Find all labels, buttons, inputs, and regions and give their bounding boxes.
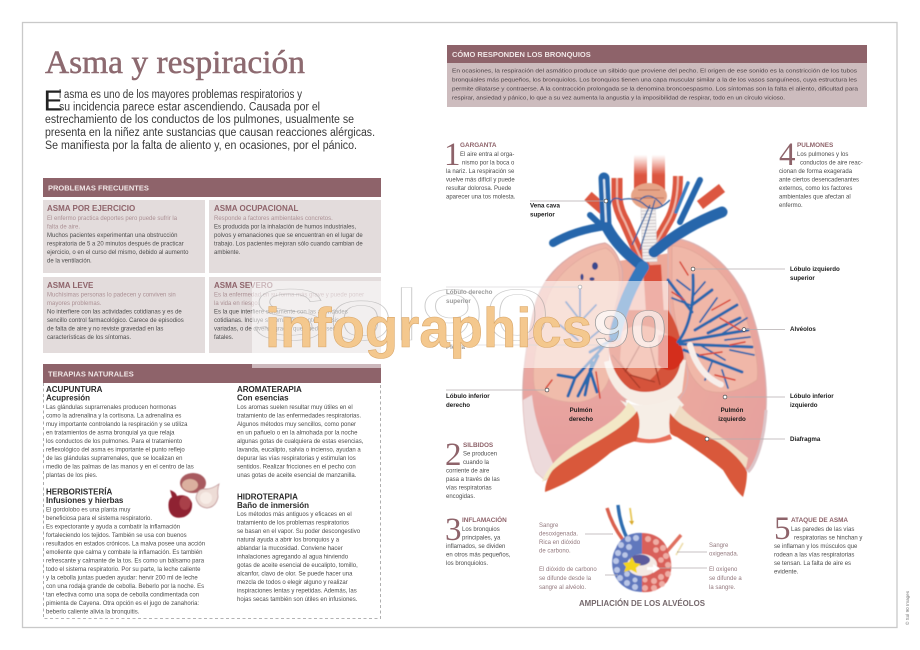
veins — [553, 178, 722, 335]
thyroid — [631, 183, 667, 209]
labels: alveoli: sangre al alvéolo. — [539, 585, 586, 591]
step 3: inflamación: los bronquiolos. — [446, 561, 488, 567]
text block: herboristería: con una rodaja grande de cebolla. Beberlo por la noche. Es — [46, 584, 204, 590]
text block: acupuntura: reflexológico del asma es importante el punto reflejo — [46, 448, 185, 454]
card: asma leve: características de los síntomas. — [47, 335, 131, 341]
labels: alveoli: El dióxido de carbono — [539, 567, 597, 573]
card: asma por ejercicio: falta de aire. — [47, 224, 80, 230]
step 4: pulmones: ante ciertos desencadenantes — [779, 178, 859, 184]
heading: cómo responden los bronquios: CÓMO RESPONDEN LOS BRONQUIOS — [452, 50, 591, 59]
text block: hidroterapia: inspiraciones lentas y repetidas. Además, las — [237, 588, 357, 594]
card: asma severo: Es la enfermedad en su forma más grave y puede poner — [214, 292, 364, 298]
spots — [580, 262, 598, 281]
step 2: silbidos: corriente de aire — [446, 468, 490, 474]
intro paragraph: l asma es uno de los mayores problemas respiratorios y — [59, 89, 302, 101]
text block: aromaterapia: lavanda, eucalipto, salvia o incienso, ayudan a — [237, 448, 361, 454]
step 3: inflamación — [445, 512, 511, 567]
step 3: inflamación: principales, ya — [462, 536, 501, 542]
text block: aromaterapia: Con esencias — [237, 394, 289, 402]
step 3: inflamación: INFLAMACIÓN — [462, 515, 507, 524]
text block: aromaterapia: Algunos métodos muy sencillos, como poner — [237, 422, 356, 428]
text block: herboristería: Infusiones y hierbas — [46, 496, 124, 505]
card: asma severo: cotidianas. Incluye síntomas frecuentes y crisis — [214, 318, 339, 324]
text block: acupuntura: muy importante controlando la respiración y se utiliza — [46, 422, 188, 428]
labels: alveoli: El oxígeno — [709, 567, 738, 573]
labels: alveoli: desoxigenada. — [539, 532, 578, 538]
text block: aromaterapia: sentidos. Realizar fricciones en el pecho con — [237, 464, 356, 470]
text block: hidroterapia: tratamiento de los problemas respiratorios — [237, 520, 349, 526]
step 5: ataque de asma: rodean a las vías respiratorias — [774, 552, 854, 558]
labels: lungs: superior — [446, 298, 471, 305]
card: asma leve: de falta de aire y no reviste gravedad en las — [47, 326, 163, 332]
text block: acupuntura: de las glándulas suprarrenales, que se localizan en — [46, 456, 182, 462]
step 4: pulmones: externos, como los factores — [779, 186, 852, 192]
bronchial tree right — [546, 288, 612, 398]
card: asma por ejercicio — [43, 200, 205, 273]
card: asma por ejercicio: El enfermo practica deportes pero puede sufrir la — [47, 216, 178, 222]
card: asma severo: variadas, o de diverso grado, que pueden ser — [214, 326, 335, 332]
text block: herboristería: El gordolobo es una planta muy — [46, 508, 130, 514]
step 5: ataque de asma: se inflaman y los músculos que — [774, 544, 858, 550]
intro paragraph: su incidencia parece estar ascendiendo. Causada por el — [59, 102, 320, 114]
text block: herboristería: y la cebolla juntas pueden ayudar: hervir 200 ml de leche — [46, 576, 198, 582]
step 4: pulmones: enfermo. — [779, 203, 803, 209]
step 5: ataque de asma: se tensan. La falta de aire es — [774, 561, 851, 567]
text block: hidroterapia: Los métodos más antiguos y eficaces en el — [237, 512, 352, 518]
step 3: inflamación: 3 — [445, 512, 462, 548]
text block: herboristería: HERBORISTERÍA — [46, 488, 112, 496]
labels: lungs: Vena cava — [530, 202, 560, 210]
text block: hidroterapia: ablandar la mucosidad. Conviene hacer — [237, 546, 343, 552]
credit: © Sol 90 Images — [904, 590, 910, 625]
card: asma severo: ASMA SEVERO — [214, 281, 273, 290]
bronchial tree left — [668, 262, 754, 388]
card: asma ocupacional: Responde a factores ambientales concretos. — [214, 216, 333, 222]
labels: alveoli: se difunde desde la — [539, 576, 592, 582]
text block: hidroterapia: natural ayuda a abrir los bronquios y a — [237, 538, 340, 544]
step 4: pulmones: conductos de aire reac- — [800, 160, 863, 166]
step 3: inflamación: en otros más pequeños, — [446, 552, 511, 558]
text block: acupuntura — [46, 385, 194, 479]
labels: lungs: Lóbulo izquierdo — [790, 266, 840, 273]
labels: lungs: Lóbulo inferior — [446, 393, 490, 400]
text block: hidroterapia: se basan en el vapor. Su poder descongestivo — [237, 529, 361, 535]
heart — [609, 310, 681, 392]
step 5: ataque de asma: ATAQUE DE ASMA — [791, 517, 848, 524]
labels: alveoli: la sangre. — [709, 585, 736, 591]
text block: herboristería: emoliente que calma y combate la inflamación. Es también — [46, 550, 202, 556]
labels: lungs: Lóbulo derecho — [446, 289, 493, 296]
step 4: pulmones: cionan de forma exagerada — [779, 169, 853, 175]
step 1: garganta: resultar dolorosa. Puede — [446, 186, 512, 192]
card: asma por ejercicio: Muchos pacientes experimentan una obstrucción — [47, 233, 177, 239]
text block: aromaterapia: AROMATERAPIA — [237, 385, 302, 394]
step 4: pulmones: PULMONES — [797, 142, 834, 149]
watermark — [250, 276, 668, 368]
text block: acupuntura: Las glándulas suprarrenales producen hormonas — [46, 405, 176, 411]
card: asma ocupacional: trabajo. Los pacientes mejoran sólo cuando cambian de — [214, 242, 363, 248]
pericardium base — [604, 360, 686, 406]
text block: hidroterapia: Baño de inmersión — [237, 501, 309, 510]
step 4: pulmones: 4 — [779, 137, 796, 173]
card: asma por ejercicio: respiratoria de 5 a 20 minutos después de practicar — [47, 242, 184, 248]
step 1: garganta: aparecer una tos molesta. — [446, 194, 516, 200]
card: asma ocupacional — [209, 200, 381, 273]
card: asma severo: la vida en riesgo. — [214, 301, 260, 307]
heading: problemas frecuentes — [43, 178, 381, 197]
text block: aromaterapia: en un pañuelo o en la almohada por la noche — [237, 430, 358, 436]
card: asma severo: fatales. — [214, 335, 234, 341]
labels: lungs: Lóbulo inferior — [790, 393, 834, 400]
text block: herboristería: todo el sistema respiratorio. Por su parte, la leche caliente — [46, 567, 201, 573]
labels: lungs: Pulmón — [570, 407, 593, 414]
step 2: silbidos: 2 — [445, 437, 462, 473]
text block: acupuntura: medio de las palmas de las manos y en el centro de las — [46, 464, 194, 470]
card: asma severo: Es la que interfiere seriamente con las actividades — [214, 310, 348, 316]
intro paragraph — [44, 86, 375, 152]
text block: aromaterapia — [237, 385, 364, 479]
intro paragraph: estrechamiento de los conductos de los pulmones, usualmente se — [45, 114, 354, 126]
labels: lungs: Pleura — [446, 344, 465, 351]
step 1: garganta: GARGANTA — [460, 142, 497, 149]
step 2: silbidos: encogidas. — [446, 494, 475, 500]
intro paragraph: Se manifiesta por la falta de aliento y, en ocasiones, por el pánico. — [45, 140, 357, 152]
text block: bronquios: En ocasiones, la respiración del asmático produce un silbido que proviene del pecho. El origen de ese sonido es la constricción de los tubos — [452, 68, 857, 74]
upper vessels and trachea — [588, 155, 722, 330]
step 1: garganta: la nariz. La respiración se — [446, 169, 515, 175]
step 3: inflamación: Los bronquios — [462, 527, 500, 533]
intro paragraph: E — [44, 86, 63, 118]
diaphragm — [620, 397, 684, 439]
step 5: ataque de asma: respiratorias se hinchan y — [794, 536, 862, 542]
watermark: infographics — [265, 296, 592, 359]
card: asma por ejercicio: ejercicio, o en el curso del mismo, debido al aumento — [47, 250, 189, 256]
card: asma leve: ASMA LEVE — [47, 281, 94, 290]
labels: lungs — [446, 199, 840, 443]
intro paragraph: presenta en la niñez ante sustancias que causan reacciones alérgicas. — [45, 127, 375, 139]
panel: terapias naturales — [43, 364, 381, 618]
text block: bronquios: bronquiales más pequeños, los bronquiolos. Los bronquios tienen una capa muscular similar a la de los vasos sanguíneos, cuya estructura les — [452, 78, 857, 84]
labels: alveoli: Rica en dióxido — [539, 540, 581, 546]
left lung: viewer left — [523, 243, 627, 480]
icon: onions — [168, 473, 219, 518]
step 2: silbidos: vías respiratorias — [446, 486, 492, 492]
labels: lungs: Diafragma — [790, 436, 821, 443]
text block: herboristería — [46, 488, 205, 616]
step 2: silbidos: pasa a través de las — [446, 477, 500, 483]
text block: hidroterapia: alcanfor, clavo de olor. Se puede hacer una — [237, 572, 353, 578]
step 4: pulmones — [779, 137, 863, 209]
card: asma por ejercicio: de la ventilación. — [47, 258, 92, 264]
step 2: silbidos — [445, 437, 500, 500]
labels: alveoli: Sangre — [539, 523, 559, 529]
card: asma ocupacional: ASMA OCUPACIONAL — [214, 204, 299, 213]
step 3: inflamación: inflamados, se dividen — [446, 544, 505, 550]
step 1: garganta: nismo por la boca o — [462, 160, 515, 166]
text block: aromaterapia: depurar las vías respiratorias y estimulan los — [237, 456, 356, 462]
step 1: garganta — [444, 137, 516, 200]
text block: bronquios: respirar, ansiedad y pánico, lo que a su vez aumenta la angustia y la imposibilidad de respirar, todo en un círculo vicioso. — [452, 96, 785, 102]
text block: acupuntura: en tratamientos de asma bronquial ya que relaja — [46, 430, 175, 436]
card: asma ocupacional: Es producida por la inhalación de humos industriales, — [214, 224, 356, 230]
lungs illustration — [523, 155, 766, 497]
text block: herboristería: tan efectiva como una sopa de cebolla condimentada con — [46, 592, 199, 598]
mediastinum — [610, 250, 692, 400]
card: asma por ejercicio: ASMA POR EJERCICIO — [47, 204, 135, 213]
heading: terapias naturales — [43, 364, 381, 383]
labels: lungs: izquierdo — [718, 416, 746, 423]
text block: herboristería: resultados en estados crónicos. La malva posee una acción — [46, 542, 205, 548]
text block: hidroterapia: gotas de aceite esencial de eucalipto, tomillo, — [237, 563, 358, 569]
labels: lungs: Alvéolos — [790, 326, 816, 333]
text block: hidroterapia: inhalaciones agregando al agua hirviendo — [237, 554, 349, 560]
text block: aromaterapia: unas gotas de aceite esencial de manzanilla. — [237, 473, 357, 479]
panel: problemas frecuentes — [43, 178, 381, 353]
text block: acupuntura: Acupresión — [46, 394, 90, 402]
arrows: gas direction — [630, 508, 632, 522]
step 2: silbidos: SILBIDOS — [463, 442, 494, 449]
text block: hidroterapia: HIDROTERAPIA — [237, 492, 298, 502]
labels: lungs: superior — [790, 275, 815, 282]
heading: ampliación de los alvéolos: AMPLIACIÓN DE LOS ALVÉOLOS — [579, 599, 706, 608]
heading: problemas frecuentes: PROBLEMAS FRECUENTES — [48, 184, 149, 192]
right lung: viewer right — [668, 238, 766, 472]
card: asma ocupacional: polvos y emanaciones que se encuentran en el lugar de — [214, 233, 363, 239]
alveoli illustration — [607, 505, 683, 592]
watermark: Sol90 — [250, 276, 550, 356]
card: asma leve: mayores problemas. — [47, 301, 102, 307]
step 2: silbidos: cuando la — [463, 460, 490, 466]
text block: aromaterapia: algunas gotas de cualquiera de estas esencias, — [237, 439, 364, 445]
card: asma severo — [209, 277, 381, 353]
text block: acupuntura: los conductos de los pulmones. Para el tratamiento — [46, 439, 183, 445]
text block: herboristería: beberlo caliente alivia la bronquitis. — [46, 610, 140, 616]
labels: lungs: superior — [530, 212, 555, 218]
text block: acupuntura: como la adrenalina y la cortisona. La adrenalina es — [46, 414, 181, 420]
text block: herboristería: pimienta de Cayena. Otra opción es el jugo de zanahoria: — [46, 601, 199, 607]
card: asma leve — [43, 277, 205, 353]
card: asma leve: sencillo control farmacológico. Carece de episodios — [47, 318, 184, 324]
card: asma leve: Muchísimas personas lo padecen y conviven sin — [47, 292, 176, 298]
step 5: ataque de asma: 5 — [774, 511, 790, 547]
pleura edge right — [748, 410, 766, 472]
step 2: silbidos: Se producen — [463, 452, 497, 458]
text block: herboristería: refrescante y calmante de la tos. Es como un bálsamo para — [46, 558, 205, 564]
text block: bronquios: permite dilatarse y contraerse. A la contracción prolongada se la denomina broncoespasmo. Los síntomas son la falta el aliento, dificultad para — [452, 86, 859, 92]
labels: lungs: Pulmón — [721, 407, 744, 414]
text block: hidroterapia: hojas secas también son útiles en infusiones. — [237, 597, 358, 603]
card: asma ocupacional: ambiente. — [214, 250, 241, 256]
step 4: pulmones: Los pulmones y los — [797, 152, 848, 158]
labels: lungs: derecho — [569, 416, 593, 423]
text block: herboristería: Es expectorante y ayuda a combatir la inflamación — [46, 524, 180, 530]
labels: lungs: izquierdo — [790, 402, 818, 409]
step 5: ataque de asma: Las paredes de las vías — [791, 527, 854, 533]
labels: lungs: derecho — [446, 402, 470, 409]
text block: acupuntura: plantas de los pies. — [46, 473, 98, 479]
panel: cómo responden los bronquios — [447, 45, 867, 107]
step 1: garganta: 1 — [444, 137, 460, 173]
text block: hidroterapia: mezcla de todos o elegir alguno y realizar — [237, 580, 348, 586]
step 1: garganta: vuelve más difícil y puede — [446, 178, 515, 184]
card: asma leve: No interfiere con las actividades cotidianas y es de — [47, 310, 182, 316]
heading: cómo responden los bronquios — [447, 45, 867, 63]
title: Asma y respiración — [45, 45, 305, 81]
labels: alveoli: de carbono. — [539, 548, 571, 554]
step 4: pulmones: ambientales que afectan al — [779, 194, 851, 200]
labels: alveoli: se difunde a — [709, 576, 742, 582]
labels: alveoli: Sangre — [709, 543, 729, 549]
text block: aromaterapia: tratamiento de las enfermedades respiratorias. — [237, 414, 361, 420]
step 5: ataque de asma: evidente. — [774, 570, 799, 576]
heading: terapias naturales: TERAPIAS NATURALES — [48, 370, 134, 378]
text block: herboristería: fortaleciendo los tejidos. También se usa con buenos — [46, 533, 187, 539]
labels: alveoli — [539, 523, 742, 591]
watermark: 90 — [593, 301, 667, 359]
labels: alveoli: oxigenada. — [709, 552, 739, 558]
step 1: garganta: El aire entra al orga- — [460, 152, 514, 158]
text block: herboristería: beneficiosa para el sistema respiratorio. — [46, 516, 152, 522]
text block: hidroterapia — [237, 492, 361, 603]
text block: aromaterapia: Los aromas suelen resultar muy útiles en el — [237, 405, 353, 411]
text block: acupuntura: ACUPUNTURA — [46, 385, 103, 394]
text block: bronquios — [452, 68, 859, 102]
step 5: ataque de asma — [774, 511, 862, 576]
